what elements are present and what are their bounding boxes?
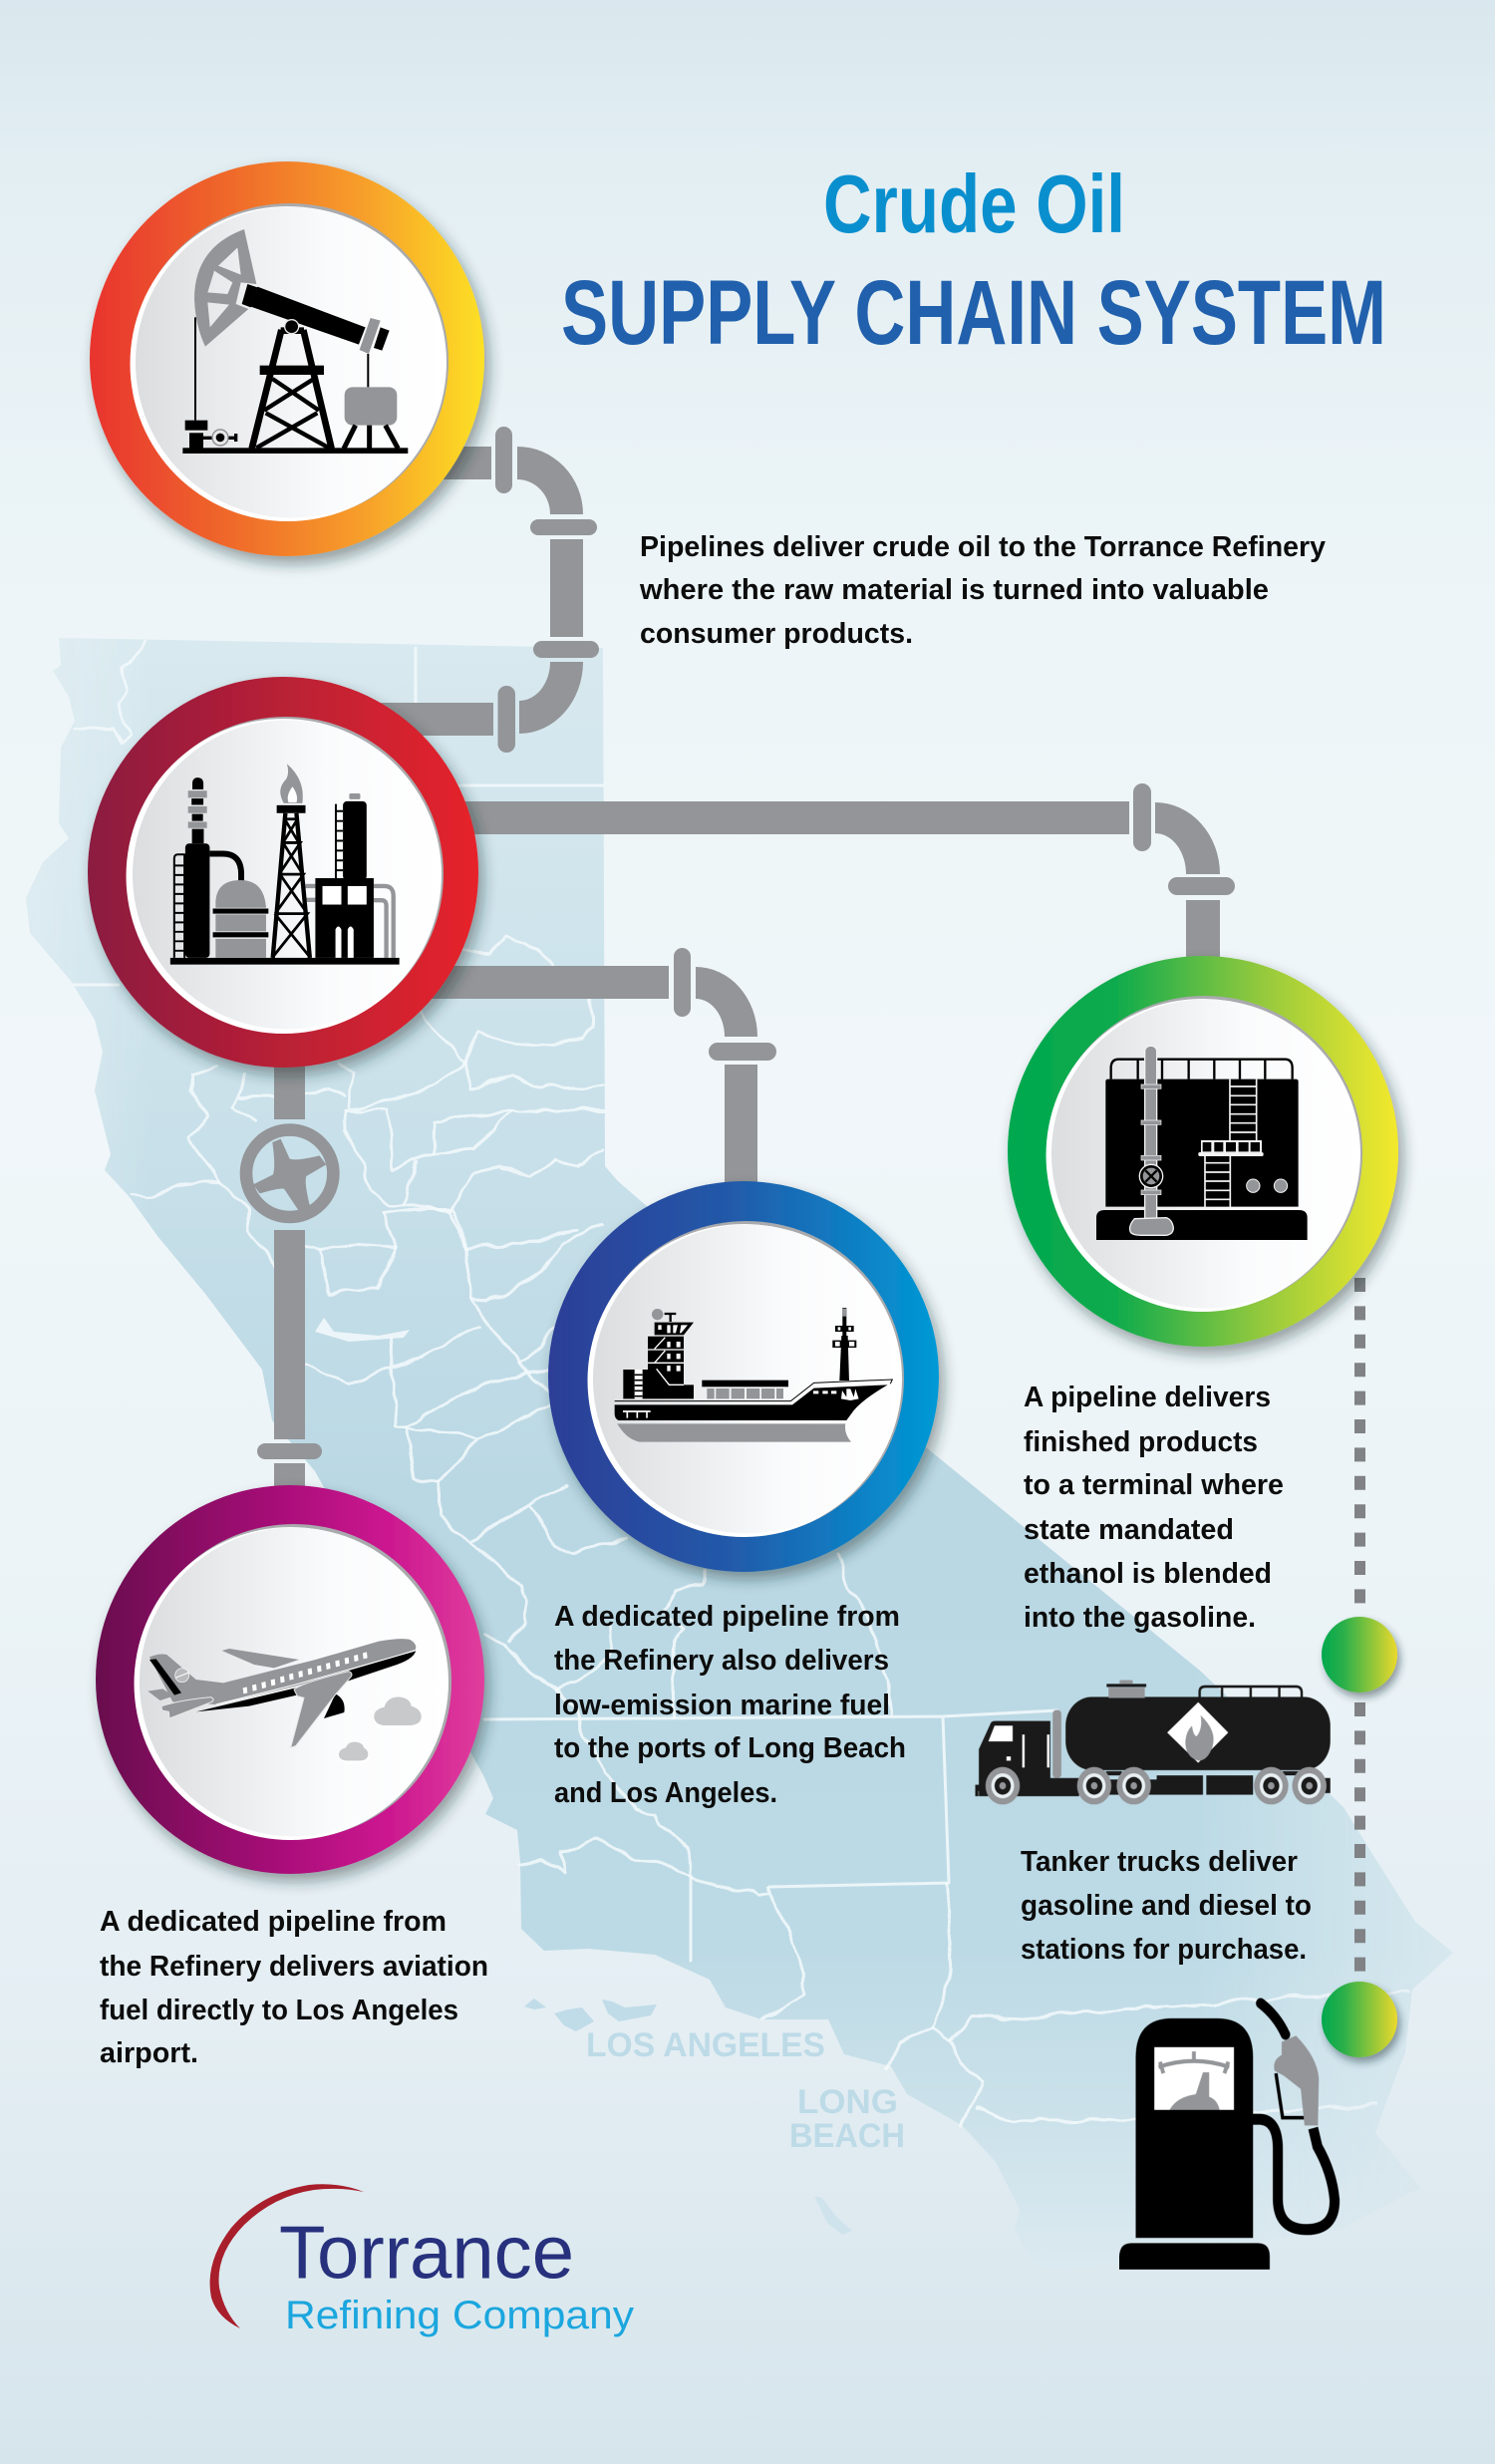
map of southern California — [26, 638, 1453, 2275]
icon: refinery plant — [170, 764, 400, 965]
badge: refinery — [88, 677, 478, 1068]
text block: marine fuel: low-emission marine fuel — [554, 1690, 890, 1721]
text block: marine fuel: to the ports of Long Beach — [554, 1732, 906, 1764]
text block: aviation: fuel directly to Los Angeles — [100, 1995, 458, 2026]
badge: fuel terminal — [1008, 956, 1398, 1347]
text block: terminal: A pipeline delivers — [1024, 1382, 1271, 1413]
pipe: refinery to terminal — [458, 783, 1235, 965]
text block: marine fuel: A dedicated pipeline from — [554, 1601, 900, 1633]
badge: aviation — [96, 1485, 484, 1874]
icon: fuel pump — [1119, 2003, 1335, 2270]
text block: aviation — [100, 1906, 488, 2069]
icon: ship — [615, 1308, 892, 1442]
text block: pipelines: where the raw material is turned into valuable — [639, 574, 1269, 606]
pipe: refinery to ship — [429, 948, 776, 1189]
title: Crude Oil — [823, 157, 1125, 250]
text block: terminal — [1024, 1382, 1284, 1634]
icon: airplane and clouds — [148, 1639, 422, 1763]
pipe: wellhead to refinery — [379, 427, 599, 753]
text block: terminal: ethanol is blended — [1024, 1558, 1272, 1590]
logo: Torrance Refining Company: Torrance — [279, 2211, 574, 2295]
logo swoosh — [210, 2184, 364, 2328]
map label: Long Beach: LONG — [797, 2083, 898, 2121]
icon: storage tank — [1096, 1046, 1308, 1240]
text block: tanker trucks: gasoline and diesel to — [1021, 1890, 1312, 1922]
text block: terminal: into the gasoline. — [1024, 1602, 1256, 1634]
text block: marine fuel: and Los Angeles. — [554, 1777, 777, 1809]
text block: terminal: finished products — [1024, 1426, 1258, 1458]
map label: Los Angeles: LOS ANGELES — [586, 2026, 825, 2064]
green route marker upper — [1322, 1617, 1397, 1693]
map label: Long Beach — [789, 2083, 905, 2155]
dotted truck route — [1354, 1278, 1365, 1974]
pipe and valve: refinery to airport — [246, 1057, 333, 1493]
text block: tanker trucks: Tanker trucks deliver — [1021, 1846, 1298, 1878]
text block: aviation: airport. — [100, 2037, 198, 2069]
text block: tanker trucks — [1021, 1846, 1312, 1966]
text block: marine fuel: the Refinery also delivers — [554, 1645, 889, 1677]
text block: pipelines — [639, 531, 1326, 650]
badge: marine tanker — [548, 1181, 939, 1572]
green route marker lower — [1322, 1982, 1397, 2057]
badge: oil well — [90, 161, 484, 556]
logo: Torrance Refining Company — [210, 2184, 634, 2337]
map label: Long Beach: BEACH — [789, 2117, 905, 2155]
text block: marine fuel — [554, 1601, 906, 1809]
icon: tanker truck — [976, 1681, 1331, 1804]
text block: aviation: A dedicated pipeline from — [100, 1906, 447, 1938]
text block: terminal: to a terminal where — [1024, 1469, 1284, 1501]
text block: terminal: state mandated — [1024, 1514, 1234, 1546]
logo: Torrance Refining Company: Refining Company — [285, 2294, 634, 2337]
text block: aviation: the Refinery delivers aviation — [100, 1951, 488, 1983]
text block: tanker trucks: stations for purchase. — [1021, 1934, 1307, 1966]
text block: pipelines: consumer products. — [640, 618, 913, 650]
title — [561, 157, 1386, 364]
text block: pipelines: Pipelines deliver crude oil to the Torrance Refinery — [640, 531, 1326, 563]
icon: pump jack — [182, 229, 408, 454]
